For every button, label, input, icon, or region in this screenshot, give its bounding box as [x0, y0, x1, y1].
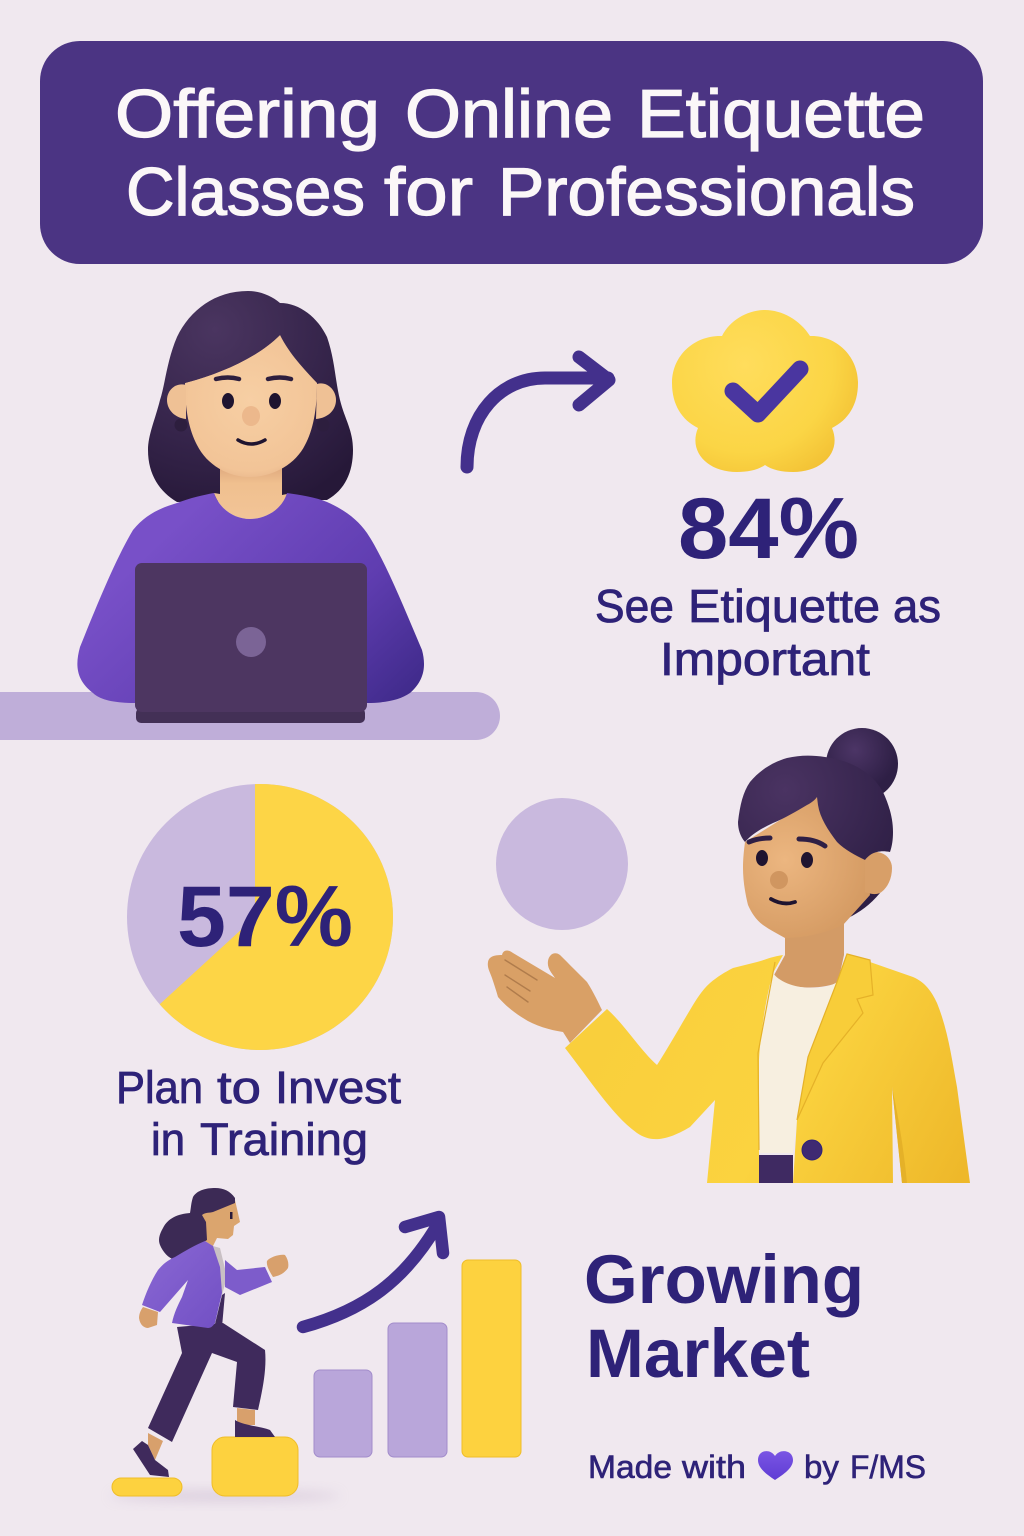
- pie chart: 57%: [127, 784, 393, 1050]
- label: see etiquette as important: as: [893, 580, 941, 632]
- nose: [770, 871, 788, 889]
- shirt: [213, 1246, 227, 1295]
- jacket: [142, 1241, 222, 1328]
- steps: [112, 1437, 298, 1496]
- jacket right side: [793, 954, 970, 1183]
- front arm: [225, 1260, 272, 1295]
- jacket left side and arm: [565, 955, 783, 1183]
- heading: growing market: Market: [586, 1315, 810, 1392]
- badge icon: flower with check mark: [672, 310, 858, 472]
- hair bun: [826, 728, 898, 800]
- desk: [0, 692, 500, 740]
- mouth: [771, 899, 795, 903]
- eyebrows: [216, 378, 291, 379]
- heading: growing market: [584, 1241, 864, 1392]
- label: plan to invest in training: Invest: [275, 1062, 402, 1113]
- button: [802, 1140, 822, 1160]
- back leg skin: [148, 1433, 163, 1460]
- face: [185, 335, 317, 477]
- title text: for: [384, 154, 473, 230]
- shadow under steps: [110, 1491, 340, 1501]
- eye: [230, 1212, 232, 1219]
- nose: [242, 406, 260, 426]
- eyes: [756, 850, 768, 866]
- stat: 57%: 57%: [177, 869, 353, 965]
- label: see etiquette as important: Etiquette: [688, 580, 880, 632]
- title text: Classes: [126, 154, 365, 230]
- credit: made with heart by F/MS: with: [681, 1449, 746, 1485]
- bar chart: [314, 1260, 521, 1457]
- label: see etiquette as important: [595, 580, 941, 685]
- character: woman at laptop: [77, 291, 424, 703]
- earrings: [174, 418, 188, 432]
- title text: Professionals: [498, 154, 915, 230]
- face: [743, 797, 870, 938]
- hair fringe: [165, 296, 282, 392]
- label: plan to invest in training: [116, 1062, 402, 1165]
- palm lines: [505, 960, 537, 1002]
- trousers: [759, 1155, 793, 1183]
- inner top dark: [215, 1293, 225, 1327]
- character: woman climbing steps: [133, 1188, 288, 1477]
- neck: [214, 460, 287, 519]
- left lapel fold: [758, 962, 775, 1150]
- mouth: [238, 440, 265, 444]
- front shoe: [235, 1420, 275, 1437]
- lilac circle: [496, 798, 628, 930]
- eyebrows: [749, 838, 825, 846]
- back shoe: [133, 1441, 169, 1477]
- title banner: [40, 41, 983, 264]
- credit: made with heart by F/MS: F/MS: [850, 1449, 926, 1485]
- hair back: [835, 885, 880, 918]
- icon: heart: [758, 1451, 793, 1480]
- face: [200, 1200, 240, 1246]
- laptop: [135, 563, 367, 723]
- title text: Offering: [115, 76, 380, 152]
- title text: Online: [405, 76, 613, 152]
- eyes: [222, 393, 234, 409]
- arrow: curved right: [467, 357, 609, 467]
- label: see etiquette as important: Important: [660, 633, 870, 685]
- sweater: [77, 493, 424, 703]
- hand: [488, 951, 602, 1043]
- ponytail hair: [159, 1188, 235, 1260]
- hair: [148, 291, 353, 502]
- label: plan to invest in training: Plan: [116, 1062, 203, 1113]
- lapel: [797, 954, 873, 1120]
- hair top: [738, 756, 893, 860]
- title text: [115, 76, 925, 230]
- credit: made with heart by F/MS: [588, 1449, 926, 1485]
- back hand: [139, 1307, 158, 1328]
- label: plan to invest in training: in: [151, 1114, 185, 1165]
- laptop logo: [236, 627, 266, 657]
- fist: [267, 1255, 288, 1277]
- trousers: [148, 1323, 265, 1442]
- character: woman in yellow blazer: [488, 728, 970, 1183]
- ears: [167, 384, 186, 419]
- neck: [773, 910, 844, 987]
- credit: made with heart by F/MS: Made: [588, 1449, 672, 1485]
- ear: [865, 852, 892, 894]
- stat: 84%: 84%: [678, 481, 859, 577]
- label: plan to invest in training: Training: [200, 1114, 368, 1165]
- front leg skin: [237, 1408, 255, 1425]
- arrow: growth: [303, 1217, 443, 1327]
- label: plan to invest in training: to: [217, 1062, 261, 1113]
- sleeve gap: [892, 1087, 907, 1183]
- credit: made with heart by F/MS: by: [804, 1449, 839, 1485]
- shirt: [758, 973, 837, 1153]
- title text: Etiquette: [637, 76, 925, 152]
- heading: growing market: Growing: [584, 1241, 864, 1318]
- label: see etiquette as important: See: [595, 580, 674, 632]
